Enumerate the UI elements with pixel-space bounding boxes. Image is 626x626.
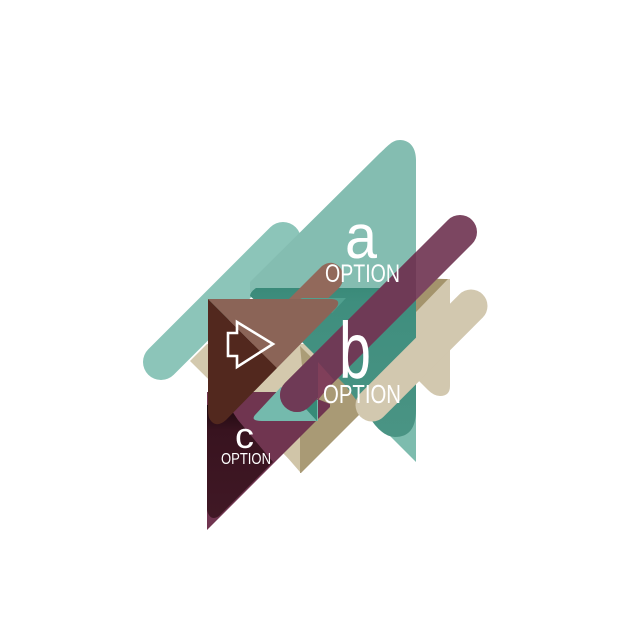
label: option b: b: [339, 306, 371, 395]
panel: option a teal triangle: [250, 140, 416, 292]
beige tall bar: [400, 279, 450, 396]
label: option a: a: [345, 203, 377, 272]
label: option b: OPTION: [323, 379, 401, 409]
panel: teal capsule left: [161, 240, 283, 362]
panel: maroon capsule: [297, 232, 460, 395]
panel: option c maroon triangle: [207, 392, 330, 530]
light teal triangle: [254, 387, 318, 421]
panel: option b dark teal shape: [250, 288, 416, 437]
beige small triangle: [255, 346, 312, 391]
label: option b: [323, 306, 401, 409]
label: option c: [221, 415, 271, 468]
tan small triangle: [300, 346, 311, 366]
panel: brown triangle: [208, 299, 338, 424]
label: option c: OPTION: [221, 451, 271, 468]
label: option a: [325, 203, 400, 288]
dark teal triangle edge: [305, 395, 317, 421]
beige capsule right: [372, 306, 471, 405]
option c dark panel: [207, 405, 273, 518]
infographic: [143, 140, 488, 530]
label: option a: OPTION: [325, 260, 400, 288]
beige background square: [190, 344, 340, 472]
maroon overlap fold: [318, 362, 334, 400]
tan corner shadow: [416, 279, 448, 312]
tan diagonal band: [300, 278, 450, 473]
teal triangle tip: [370, 400, 416, 462]
label: option c: c: [235, 415, 254, 456]
brown capsule: [284, 263, 343, 306]
icon: arrow: [228, 322, 273, 367]
teal inner band corner: [300, 298, 346, 313]
